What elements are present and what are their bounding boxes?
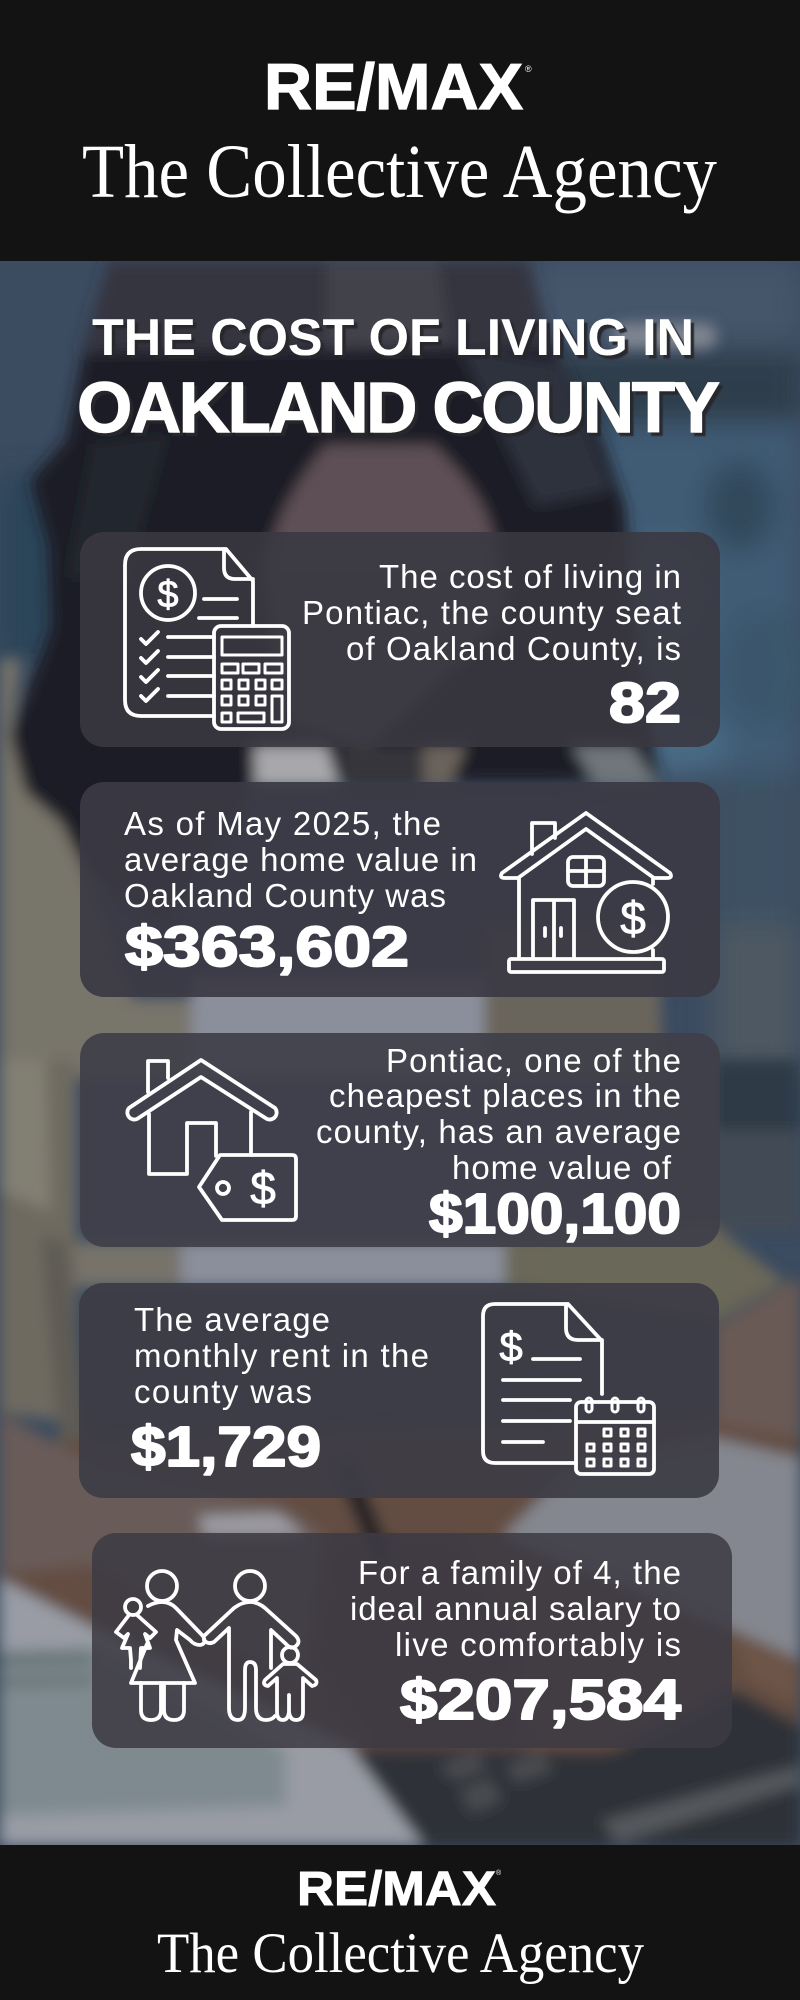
footer logo: RE/MAX bbox=[297, 1863, 496, 1916]
text: home value: average home value in bbox=[124, 841, 477, 878]
text: family salary: For a family of 4, the bbox=[358, 1554, 681, 1591]
text: Pontiac home value: home value of bbox=[452, 1149, 672, 1186]
text: cost of living bbox=[302, 558, 681, 667]
face bbox=[264, 434, 502, 532]
panel: Pontiac home value bbox=[80, 1033, 720, 1247]
icon: rent bill with calendar bbox=[483, 1304, 654, 1474]
text: family salary bbox=[350, 1554, 681, 1663]
cardigan left bbox=[0, 659, 191, 1077]
text: home value: As of May 2025, the bbox=[124, 805, 441, 842]
number: $363,602: $363,602 bbox=[125, 915, 409, 979]
number: $100,100: $100,100 bbox=[429, 1182, 681, 1246]
desk bbox=[0, 1416, 800, 1760]
title: THE COST OF LIVING IN bbox=[92, 309, 694, 367]
text: rent: The average bbox=[134, 1301, 330, 1338]
calculator bbox=[352, 1690, 800, 1846]
text: cost of living: Pontiac, the county seat bbox=[302, 594, 681, 631]
footer logo bbox=[157, 1863, 644, 1985]
number: $1,729: $1,729 bbox=[131, 1415, 321, 1479]
panel: cost of living index bbox=[80, 532, 720, 747]
right sleeve bbox=[505, 1226, 786, 1322]
icon: house with dollar coin: $ bbox=[620, 892, 646, 944]
desk right of notebook bbox=[744, 1649, 794, 1694]
footer logo: The Collective Agency bbox=[157, 1922, 644, 1985]
footer band bbox=[0, 1845, 800, 2000]
text: family salary: live comfortably is bbox=[395, 1626, 681, 1663]
text: Pontiac home value: Pontiac, one of the bbox=[386, 1042, 681, 1079]
header band bbox=[0, 0, 800, 261]
header logo: ® bbox=[525, 64, 532, 74]
panel: average home value bbox=[80, 782, 720, 997]
header logo bbox=[82, 50, 717, 214]
text: Pontiac home value: cheapest places in the bbox=[329, 1077, 681, 1114]
hair bbox=[6, 332, 666, 870]
background photo: woman reviewing bills with a calculator bbox=[0, 261, 800, 1846]
title: OAKLAND COUNTY bbox=[77, 369, 720, 448]
icon: house with price tag: $ bbox=[250, 1162, 276, 1214]
text: rent: monthly rent in the bbox=[134, 1337, 429, 1374]
text: family salary: ideal annual salary to bbox=[350, 1590, 681, 1627]
title bbox=[77, 309, 720, 448]
cardigan left lower bbox=[0, 1060, 77, 1423]
icon: family of four bbox=[116, 1571, 316, 1720]
panel: average rent bbox=[79, 1283, 719, 1498]
notebook bbox=[503, 1438, 800, 1660]
left arm bbox=[0, 1411, 324, 1575]
shirt collar bbox=[254, 746, 339, 787]
icon: house with price tag bbox=[127, 1060, 296, 1220]
text: cost of living: of Oakland County, is bbox=[346, 630, 681, 667]
icon: house with dollar coin bbox=[501, 813, 671, 972]
header logo: The Collective Agency bbox=[82, 130, 717, 214]
hand bbox=[381, 1748, 518, 1753]
text: rent bbox=[134, 1301, 429, 1410]
bright blur behind title bbox=[612, 323, 717, 349]
text: home value: Oakland County was bbox=[124, 877, 446, 914]
right arm bbox=[714, 1277, 800, 1438]
header logo: RE/MAX bbox=[264, 50, 523, 123]
paper strip bbox=[199, 1513, 306, 1536]
text: rent: county was bbox=[134, 1373, 312, 1410]
footer logo: ® bbox=[496, 1869, 502, 1877]
shirt bbox=[182, 997, 494, 1033]
icon: bill and calculator bbox=[125, 549, 289, 729]
text: Pontiac home value: county, has an average bbox=[316, 1113, 681, 1150]
pen bbox=[340, 1498, 389, 1533]
number: 82: 82 bbox=[609, 671, 681, 735]
papers bbox=[0, 1579, 423, 1846]
text: cost of living: The cost of living in bbox=[379, 558, 681, 595]
icon: rent bill with calendar: $ bbox=[499, 1323, 523, 1370]
text: home value bbox=[124, 805, 477, 914]
cardigan right bbox=[478, 997, 668, 1033]
icon: bill and calculator: $ bbox=[157, 574, 179, 616]
number: $207,584: $207,584 bbox=[400, 1668, 681, 1732]
text: Pontiac home value bbox=[316, 1042, 681, 1186]
panel: family salary bbox=[92, 1533, 732, 1748]
dark right top bbox=[720, 1126, 800, 1229]
